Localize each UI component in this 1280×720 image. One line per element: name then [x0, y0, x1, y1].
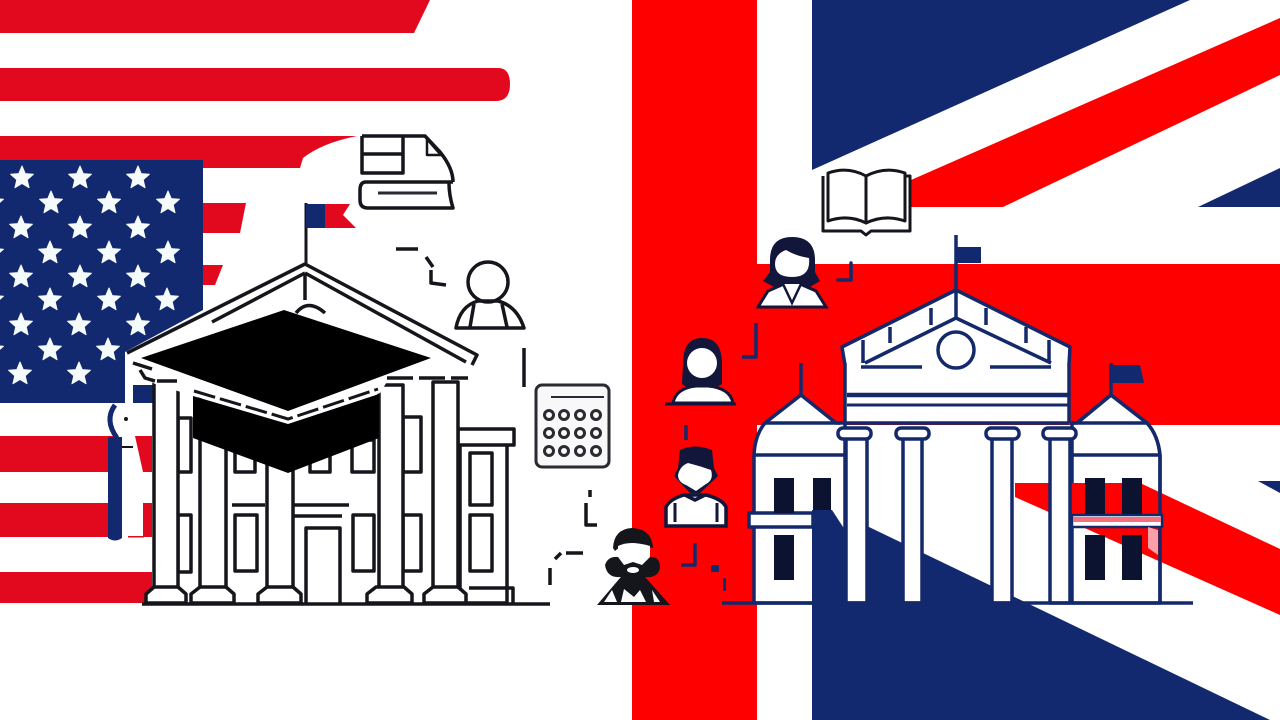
navy field top left — [812, 0, 1190, 170]
icon: woman with short hair — [665, 338, 736, 404]
upper red diagonal — [911, 18, 1280, 207]
flag on roof — [306, 203, 356, 265]
red vertical cross arm — [632, 0, 757, 720]
columns — [146, 382, 466, 603]
US university building — [127, 203, 550, 604]
icon: bearded man — [597, 528, 670, 605]
icon: woman with long hair — [758, 237, 826, 307]
cap base — [193, 394, 379, 473]
navy corner right — [1258, 481, 1280, 493]
right tower — [1072, 395, 1160, 603]
icon: open book — [823, 170, 910, 235]
flag canton with stars — [0, 160, 203, 403]
flag stripes — [0, 0, 510, 603]
graduation cap — [108, 310, 431, 540]
cap trim — [194, 389, 378, 419]
lower red diagonal — [1015, 483, 1280, 615]
icon: stacked books — [360, 136, 453, 208]
UK university building — [722, 235, 1280, 720]
US flag background — [0, 0, 510, 603]
connector — [838, 263, 851, 280]
icon: calculator — [536, 385, 609, 467]
ground line — [722, 601, 1193, 605]
icon: man with short hair — [666, 446, 726, 526]
UK flag background — [632, 0, 1280, 720]
rooftop flag — [956, 235, 981, 290]
connector — [684, 425, 688, 440]
connector — [742, 323, 756, 357]
lower navy field — [812, 510, 1270, 720]
columns — [838, 428, 1076, 603]
connector dashes — [711, 565, 726, 591]
red horizontal cross arm — [757, 264, 1280, 425]
connector — [586, 490, 597, 525]
right tower details — [1072, 363, 1162, 603]
connector — [522, 348, 526, 387]
roof pediment — [127, 264, 478, 425]
navy field right — [1198, 168, 1280, 207]
icon: person outline — [456, 262, 524, 328]
connector dashes — [550, 553, 583, 585]
connector — [681, 543, 695, 565]
windows and door — [178, 417, 421, 603]
tassel — [108, 405, 135, 540]
left tower — [749, 363, 845, 603]
annex wing — [458, 429, 514, 603]
main wall — [154, 378, 458, 603]
ground line — [142, 602, 550, 606]
cap top board — [141, 310, 431, 411]
connector dashes — [396, 249, 446, 285]
central block and pediment — [842, 235, 1070, 423]
